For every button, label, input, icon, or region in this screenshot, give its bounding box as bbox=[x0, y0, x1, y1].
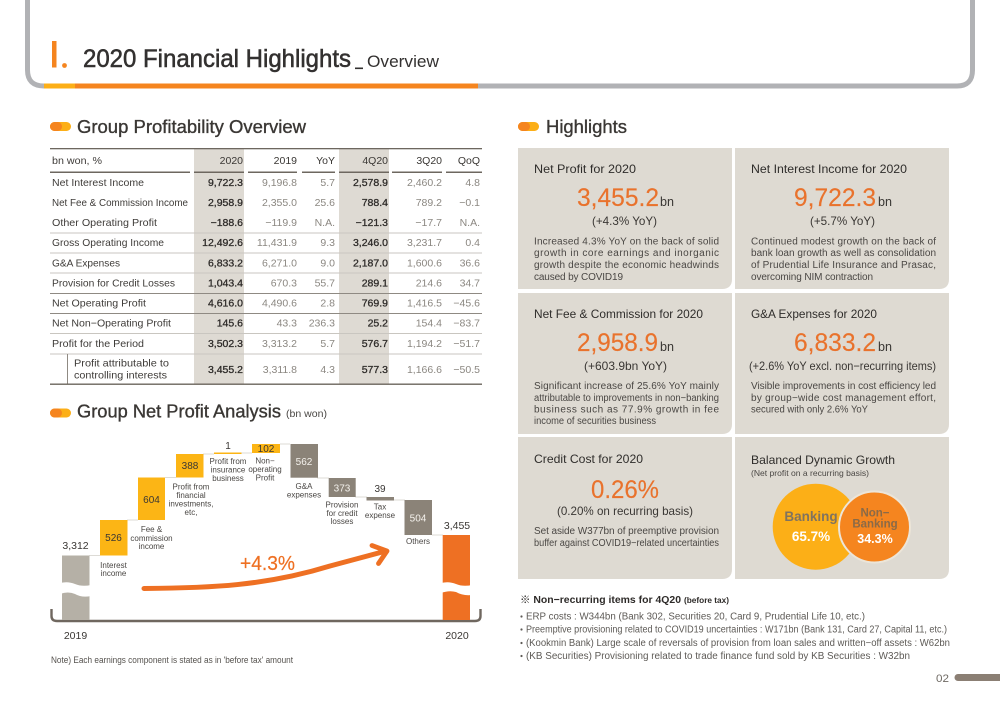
row: net non-operating profit: 154.4 bbox=[416, 318, 442, 330]
circle: banking: Banking bbox=[784, 509, 838, 524]
bar: others: 504 bbox=[410, 514, 427, 524]
heading: group net profit analysis: (bn won) bbox=[286, 409, 327, 420]
panel: net fee and commission: bn bbox=[660, 339, 674, 354]
row: net fee and commission income: 2,355.0 bbox=[262, 197, 297, 209]
heading: group profitability overview: Group Profitability Overview bbox=[77, 117, 307, 137]
row: gross operating income: 12,492.6 bbox=[202, 237, 243, 249]
circle: non-banking: Non− bbox=[860, 508, 890, 520]
bar: non-operating profit: operating bbox=[248, 465, 282, 474]
row: net interest income: 9,196.8 bbox=[262, 177, 297, 189]
row: g&a expenses: G&A Expenses bbox=[52, 258, 120, 270]
panel: net interest income: overcoming NIM contraction bbox=[751, 272, 873, 283]
panel: g&a expenses: 6,833.2 bbox=[794, 329, 876, 357]
row: net interest income: 4.8 bbox=[465, 177, 480, 189]
panel: net interest income: of Prudential Life Insurance and Prasac, bbox=[751, 260, 936, 271]
panel: net fee and commission: income of securities business bbox=[534, 416, 656, 427]
text block: non-recurring items: ERP costs : W344bn (Bank 302, Securities 20, Card 9, Prudential Life 10, etc.) bbox=[526, 612, 865, 623]
bar: 2019 bbox=[60, 540, 91, 642]
row: profit for the period: 1,194.2 bbox=[407, 338, 442, 350]
axis bbox=[52, 609, 480, 621]
row: provision for credit losses bbox=[52, 278, 480, 290]
circle: banking bbox=[773, 484, 859, 570]
bar: tax expense: Tax bbox=[374, 502, 386, 512]
row: gross operating income bbox=[52, 237, 480, 249]
panel: net interest income: bank loan growth as well as consolidation bbox=[751, 248, 936, 259]
bar: others: Others bbox=[406, 537, 430, 546]
row: net non-operating profit: −83.7 bbox=[453, 318, 480, 330]
bar: profit from financial investments: financial bbox=[176, 491, 206, 500]
row: profit attributable to controlling interests: Profit attributable to bbox=[74, 358, 169, 370]
row: gross operating income: 0.4 bbox=[465, 237, 480, 249]
row: provision for credit losses: 289.1 bbox=[362, 278, 388, 290]
heading: group net profit analysis: Group Net Profit Analysis bbox=[77, 402, 281, 422]
bar: 2020 bbox=[441, 520, 472, 642]
row: other operating profit: N.A. bbox=[315, 217, 335, 229]
panel: net profit bbox=[518, 148, 732, 289]
row: g&a expenses: 2,187.0 bbox=[353, 258, 388, 270]
row: profit for the period: 576.7 bbox=[362, 338, 388, 350]
panel: net fee and commission: Significant increase of 25.6% YoY mainly bbox=[534, 381, 719, 392]
panel: net fee and commission: Net Fee & Commission for 2020 bbox=[534, 307, 703, 321]
row: g&a expenses: 6,833.2 bbox=[208, 258, 243, 270]
table header row bbox=[52, 155, 480, 167]
table header row: 4Q20 bbox=[362, 155, 388, 167]
bar: others bbox=[404, 500, 432, 546]
panel: net profit: (+4.3% YoY) bbox=[592, 214, 657, 228]
bar: fee and commission income: 604 bbox=[143, 495, 160, 506]
row: gross operating income: 3,246.0 bbox=[353, 237, 388, 249]
bar: interest income bbox=[100, 520, 128, 578]
row: net non-operating profit: Net Non−Operating Profit bbox=[52, 318, 171, 330]
row: net operating profit: 1,416.5 bbox=[407, 298, 442, 310]
page number: 02 bbox=[936, 673, 949, 685]
row: profit for the period: 3,502.3 bbox=[208, 338, 243, 350]
row: net fee and commission income: Net Fee & Commission Income bbox=[52, 197, 188, 209]
bar: 2019: 3,312 bbox=[62, 540, 89, 552]
row: gross operating income: 3,231.7 bbox=[407, 237, 442, 249]
row: profit attributable to controlling interests bbox=[74, 358, 480, 382]
panel: credit cost: (0.20% on recurring basis) bbox=[557, 504, 693, 518]
panel: net interest income: Net Interest Income for 2020 bbox=[751, 162, 907, 176]
panel: net profit: growth despite the economic headwinds bbox=[534, 260, 719, 271]
title bbox=[52, 41, 440, 73]
row: provision for credit losses: 214.6 bbox=[416, 278, 442, 290]
panel: g&a expenses: Visible improvements in cost efficiency led bbox=[751, 381, 936, 392]
bar: profit from financial investments: Profit from bbox=[173, 482, 210, 492]
panel: credit cost: Set aside W377bn of preemptive provision bbox=[534, 526, 719, 537]
text block: non-recurring items bbox=[520, 594, 950, 662]
table header row: 3Q20 bbox=[416, 155, 442, 167]
row: profit for the period: 3,313.2 bbox=[262, 338, 297, 350]
panel: net fee and commission: (+603.9bn YoY) bbox=[584, 359, 667, 373]
row: provision for credit losses: 1,043.4 bbox=[208, 278, 243, 290]
bar: non-operating profit bbox=[248, 444, 282, 482]
panel: balanced dynamic growth: (Net profit on a recurring basis) bbox=[751, 468, 869, 478]
row: profit attributable to controlling interests: 4.3 bbox=[320, 364, 335, 376]
row: profit attributable to controlling interests: controlling interests bbox=[74, 370, 167, 382]
row: provision for credit losses: Provision for Credit Losses bbox=[52, 278, 175, 290]
bar: profit from insurance business: insurance bbox=[211, 466, 246, 474]
panel: net interest income: Continued modest growth on the back of bbox=[751, 236, 936, 247]
row: other operating profit: −119.9 bbox=[265, 217, 297, 229]
bar: fee and commission income: Fee & bbox=[141, 525, 163, 534]
panel: net interest income bbox=[735, 148, 949, 289]
panel: net interest income: (+5.7% YoY) bbox=[810, 214, 875, 228]
header frame bbox=[28, 0, 972, 88]
bar: profit from financial investments: investments, bbox=[169, 500, 213, 508]
panel: credit cost: 0.26% bbox=[591, 476, 659, 504]
bar: 2020: 3,455 bbox=[444, 520, 470, 532]
panel: credit cost bbox=[518, 437, 732, 579]
panel: net profit: Net Profit for 2020 bbox=[534, 162, 636, 176]
row: net operating profit: 769.9 bbox=[362, 298, 388, 310]
row: profit attributable to controlling interests: 3,311.8 bbox=[263, 364, 297, 376]
panel: g&a expenses: by group−wide cost management effort, bbox=[751, 393, 936, 404]
row: profit for the period: −51.7 bbox=[453, 338, 480, 350]
bar: g&a expenses: G&A bbox=[296, 482, 313, 491]
title: Overview bbox=[367, 52, 440, 71]
row: net interest income: Net Interest Income bbox=[52, 177, 144, 189]
row: profit attributable to controlling interests: 577.3 bbox=[362, 364, 388, 376]
circle: banking: 65.7% bbox=[792, 529, 830, 544]
row: other operating profit bbox=[52, 217, 480, 229]
panel: net profit: bn bbox=[660, 194, 674, 209]
bar: profit from insurance business: Profit from bbox=[210, 457, 247, 466]
panel: balanced dynamic growth: Balanced Dynamic Growth bbox=[751, 453, 895, 467]
text block: non-recurring items: (before tax) bbox=[684, 596, 729, 605]
circle: non-banking: 34.3% bbox=[857, 532, 893, 546]
row: net non-operating profit: 145.6 bbox=[217, 318, 243, 330]
row: gross operating income: 11,431.9 bbox=[257, 237, 297, 249]
bar: provision for credit losses: for credit bbox=[326, 509, 358, 518]
row: net operating profit bbox=[52, 298, 480, 310]
panel: net profit: 3,455.2 bbox=[577, 184, 659, 212]
panel: net profit: Increased 4.3% YoY on the back of solid bbox=[534, 236, 719, 247]
heading: highlights: Highlights bbox=[546, 117, 627, 137]
panel: net fee and commission: attributable to improvements in non−banking bbox=[534, 393, 719, 404]
row: provision for credit losses: 55.7 bbox=[315, 278, 335, 290]
row: net interest income bbox=[52, 177, 480, 189]
row: net non-operating profit: 25.2 bbox=[368, 318, 388, 330]
bar: g&a expenses bbox=[287, 444, 321, 500]
row: other operating profit: Other Operating Profit bbox=[52, 217, 157, 229]
row: g&a expenses bbox=[52, 258, 480, 270]
row: profit for the period: Profit for the Period bbox=[52, 338, 144, 350]
row: gross operating income: 9.3 bbox=[320, 237, 335, 249]
bar: non-operating profit: Non− bbox=[255, 456, 275, 466]
row: provision for credit losses: 34.7 bbox=[460, 278, 480, 290]
row: profit attributable to controlling interests: 3,455.2 bbox=[208, 364, 243, 376]
bar: 2020: 2020 bbox=[445, 630, 469, 642]
row: net interest income: 5.7 bbox=[320, 177, 335, 189]
row: gross operating income: Gross Operating Income bbox=[52, 237, 164, 249]
text block: non-recurring items: ※ Non−recurring items for 4Q20 bbox=[520, 594, 681, 606]
row: net interest income: 2,578.9 bbox=[353, 177, 388, 189]
panel: g&a expenses: G&A Expenses for 2020 bbox=[751, 307, 877, 321]
bar: profit from financial investments bbox=[169, 454, 213, 517]
row: net fee and commission income: 25.6 bbox=[315, 197, 335, 209]
row: other operating profit: −188.6 bbox=[211, 217, 243, 229]
panel: credit cost: Credit Cost for 2020 bbox=[534, 452, 643, 466]
panel: g&a expenses: secured with only 2.6% YoY bbox=[751, 405, 868, 416]
row: net non-operating profit: 43.3 bbox=[277, 318, 297, 330]
bar: provision for credit losses: Provision bbox=[326, 500, 358, 510]
table header row: 2019 bbox=[274, 155, 297, 167]
table header row: 2020 bbox=[220, 155, 243, 167]
bar: profit from financial investments: 388 bbox=[182, 461, 199, 472]
text block: non-recurring items: (Kookmin Bank) Large scale of reversals of provision from loan sales and written−off assets : W62bn bbox=[526, 638, 950, 649]
row: profit for the period bbox=[52, 338, 480, 350]
arrow: growth bbox=[144, 546, 387, 588]
row: provision for credit losses: 670.3 bbox=[271, 278, 297, 290]
row: net non-operating profit bbox=[52, 318, 480, 330]
row: other operating profit: N.A. bbox=[460, 217, 480, 229]
bar: interest income: 526 bbox=[105, 533, 122, 544]
bar: g&a expenses: expenses bbox=[287, 490, 321, 500]
bar: tax expense bbox=[365, 484, 396, 520]
panel: g&a expenses bbox=[735, 293, 949, 434]
bar: profit from insurance business bbox=[210, 441, 247, 483]
bar: 2019: 2019 bbox=[64, 630, 87, 642]
row: profit attributable to controlling interests: 1,166.6 bbox=[407, 364, 442, 376]
bar: profit from insurance business: business bbox=[212, 474, 244, 483]
row: net interest income: 9,722.3 bbox=[208, 177, 243, 189]
bar: profit from insurance business: 1 bbox=[225, 441, 231, 452]
panel: net interest income: 9,722.3 bbox=[794, 184, 876, 212]
bar: fee and commission income bbox=[130, 478, 173, 551]
bar: non-operating profit: Profit bbox=[256, 474, 275, 482]
page number bbox=[936, 673, 1000, 685]
row: net operating profit: Net Operating Profit bbox=[52, 298, 146, 310]
bar: g&a expenses: 562 bbox=[296, 457, 313, 468]
table: group profitability bbox=[50, 148, 482, 385]
panel: net profit: caused by COVID19 bbox=[534, 272, 623, 283]
bar: tax expense: expense bbox=[365, 511, 396, 520]
panel: net fee and commission: 2,958.9 bbox=[577, 329, 658, 357]
callout: +4.3%: +4.3% bbox=[240, 553, 295, 575]
text block: non-recurring items: (KB Securities) Provisioning related to trade finance fund sold by KB Securities : W32bn bbox=[526, 651, 910, 662]
panel: g&a expenses: (+2.6% YoY excl. non−recurring items) bbox=[749, 359, 936, 373]
panel: balanced dynamic growth bbox=[735, 437, 949, 579]
row: g&a expenses: 1,600.6 bbox=[407, 258, 442, 270]
panel: g&a expenses: bn bbox=[878, 339, 892, 354]
row: net fee and commission income: 789.2 bbox=[416, 197, 442, 209]
circle: non-banking: Banking bbox=[852, 519, 898, 531]
title: 2020 Financial Highlights bbox=[83, 45, 351, 73]
bar: interest income: Interest bbox=[100, 561, 128, 570]
panel: net interest income: bn bbox=[878, 194, 892, 209]
row: profit attributable to controlling interests: −50.5 bbox=[453, 364, 480, 376]
bar: interest income: income bbox=[101, 569, 127, 578]
row: g&a expenses: 36.6 bbox=[460, 258, 480, 270]
row: g&a expenses: 6,271.0 bbox=[262, 258, 297, 270]
panel: net fee and commission: business such as 77.9% growth in fee bbox=[534, 405, 719, 416]
table header row: QoQ bbox=[458, 155, 480, 167]
text block: non-recurring items: Preemptive provisioning related to COVID19 uncertainties : W171bn (Bank 131, Card 27, Capital 11, etc.) bbox=[526, 625, 947, 636]
panel: net fee and commission bbox=[518, 293, 732, 434]
row: g&a expenses: 9.0 bbox=[320, 258, 335, 270]
bar: tax expense: 39 bbox=[374, 484, 386, 495]
waterfall chart bbox=[52, 441, 480, 642]
bar: profit from financial investments: etc, bbox=[185, 508, 197, 517]
row: net fee and commission income: −0.1 bbox=[459, 197, 480, 209]
circle: non-banking bbox=[839, 492, 910, 562]
table header row: YoY bbox=[316, 155, 335, 167]
row: net fee and commission income bbox=[52, 197, 480, 209]
bar: provision for credit losses bbox=[326, 478, 358, 526]
row: net operating profit: −45.6 bbox=[453, 298, 480, 310]
row: net interest income: 2,460.2 bbox=[407, 177, 442, 189]
row: net non-operating profit: 236.3 bbox=[309, 318, 335, 330]
bar: fee and commission income: commission bbox=[130, 534, 173, 543]
row: other operating profit: −121.3 bbox=[356, 217, 388, 229]
row: net fee and commission income: 788.4 bbox=[362, 197, 388, 209]
row: profit for the period: 5.7 bbox=[320, 338, 335, 350]
row: net operating profit: 2.8 bbox=[320, 298, 335, 310]
panel: net profit: growth in core earnings and inorganic bbox=[534, 248, 719, 259]
row: other operating profit: −17.7 bbox=[415, 217, 442, 229]
row: net operating profit: 4,616.0 bbox=[208, 298, 243, 310]
bar: provision for credit losses: 373 bbox=[334, 484, 351, 494]
bar: non-operating profit: 102 bbox=[258, 444, 275, 455]
panel: credit cost: buffer against COVID19−related uncertainties bbox=[534, 538, 719, 549]
row: net operating profit: 4,490.6 bbox=[262, 298, 297, 310]
note: Note) Each earnings component is stated as in 'before tax' amount bbox=[51, 655, 293, 665]
bar: provision for credit losses: losses bbox=[331, 517, 353, 526]
bar: fee and commission income: income bbox=[139, 542, 165, 551]
table header row: bn won, % bbox=[52, 155, 102, 167]
row: net fee and commission income: 2,958.9 bbox=[208, 197, 243, 209]
